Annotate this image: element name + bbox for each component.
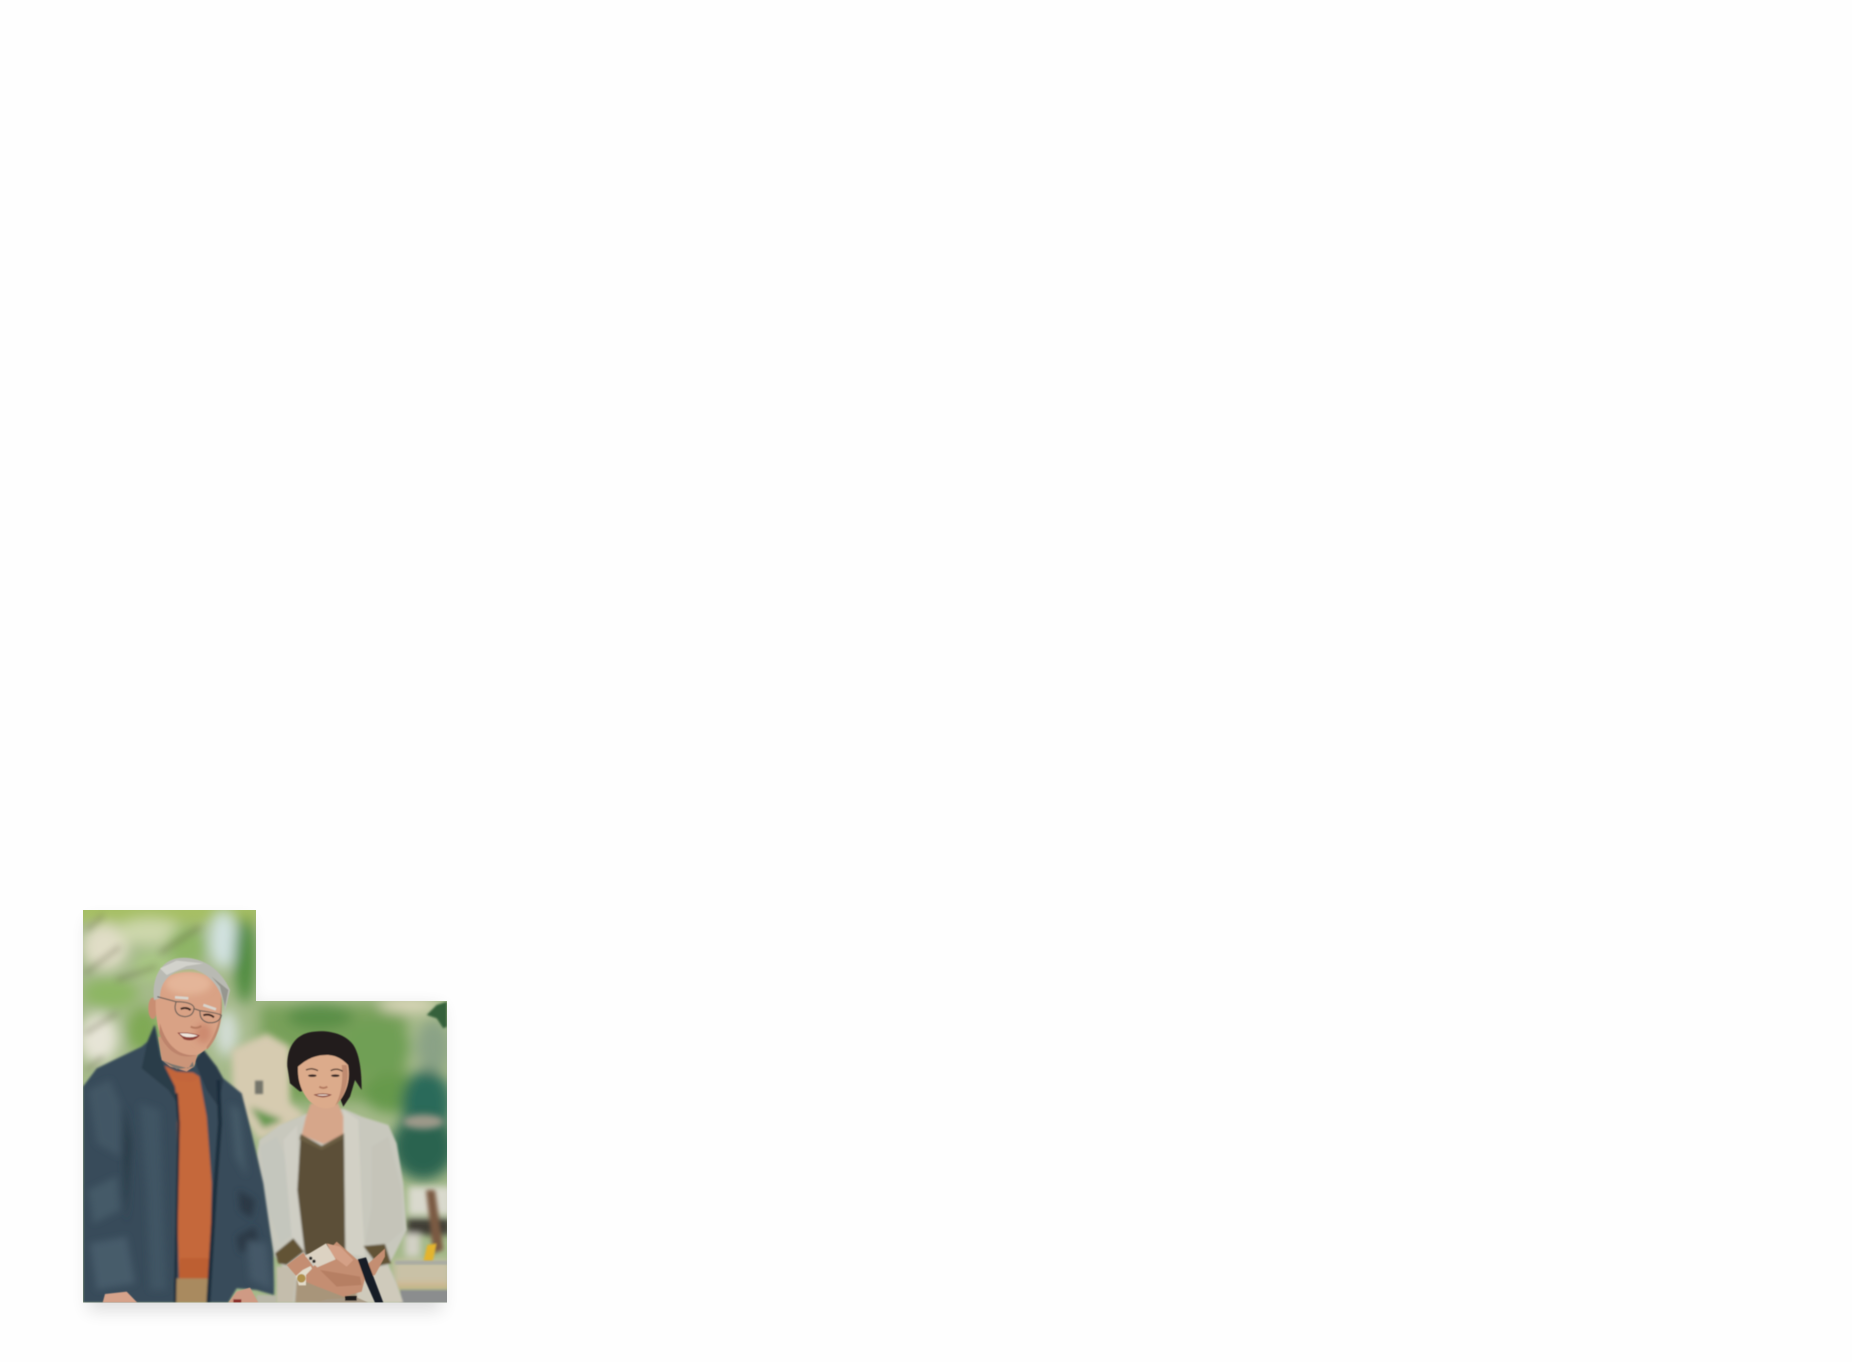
neck [158, 1037, 200, 1072]
face [156, 972, 222, 1057]
face [298, 1055, 349, 1108]
building window [255, 1081, 263, 1094]
man: head [148, 958, 230, 1072]
eyes [181, 1008, 214, 1017]
trousers [175, 1278, 209, 1303]
eyebrows [175, 997, 216, 1009]
jacket zip edges [175, 1093, 179, 1303]
nose [191, 1026, 201, 1028]
woman: hands, phone, watch and bag strap [287, 1242, 385, 1303]
jacket [83, 1025, 274, 1303]
blossoms, distant buildings and street [393, 1114, 452, 1289]
photo: older couple standing outdoors, stepped cut-out with soft shadow [83, 910, 447, 1316]
collars [142, 1025, 177, 1103]
man: hands [103, 1288, 258, 1303]
cardigan [257, 1109, 407, 1303]
brown top [297, 1133, 345, 1255]
woman: clothing [257, 1103, 407, 1303]
blurred park background [83, 910, 447, 1303]
skirt [295, 1280, 357, 1303]
man: jacket folds [88, 1080, 272, 1290]
blurred building [232, 1033, 307, 1140]
woman: head [287, 1031, 362, 1108]
sleeve cuffs [275, 1238, 304, 1265]
neck and chest [302, 1103, 343, 1144]
mouth [177, 1032, 200, 1040]
glasses [157, 997, 221, 1023]
hair [287, 1031, 362, 1107]
eyes, brows, nose, mouth [306, 1069, 343, 1071]
hair [154, 958, 230, 1012]
man: clothing [83, 1025, 274, 1303]
tree branches [85, 915, 200, 1070]
drop shadow [88, 920, 442, 1311]
ear [148, 998, 157, 1019]
photo content [83, 910, 447, 1303]
leaves at top right corner [427, 1002, 447, 1028]
orange sweater [163, 1065, 212, 1278]
